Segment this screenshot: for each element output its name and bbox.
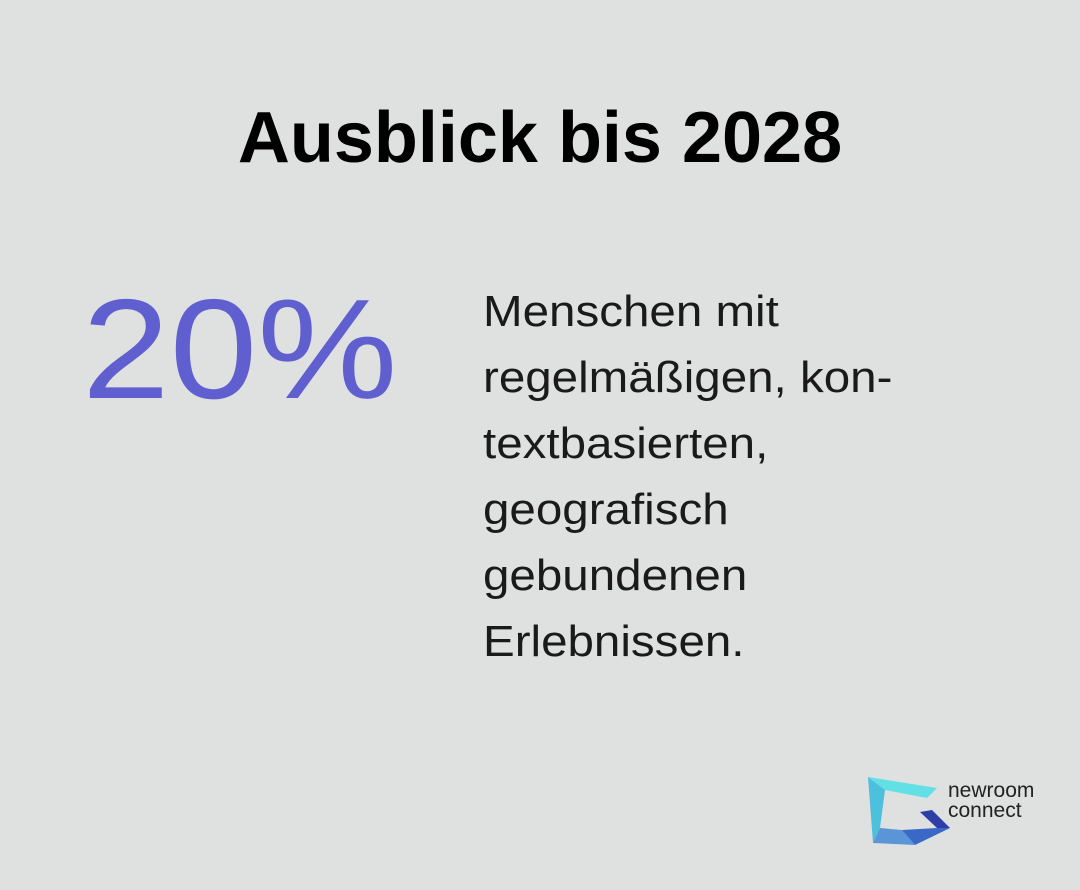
title: Ausblick bis 2028: [238, 98, 842, 178]
description text: [483, 287, 892, 666]
description text: regelmäßigen, kon-: [483, 353, 892, 402]
description text: Erlebnissen.: [483, 617, 745, 666]
description text: geografisch: [483, 485, 729, 534]
logo: newroom connect: newroom: [948, 779, 1034, 802]
logo: newroom connect: [868, 777, 1034, 845]
big statistic: 20%: [82, 270, 397, 429]
description text: textbasierten,: [483, 419, 768, 468]
description text: gebundenen: [483, 551, 747, 600]
description text: Menschen mit: [483, 287, 779, 336]
logo: newroom connect: connect: [948, 799, 1022, 822]
